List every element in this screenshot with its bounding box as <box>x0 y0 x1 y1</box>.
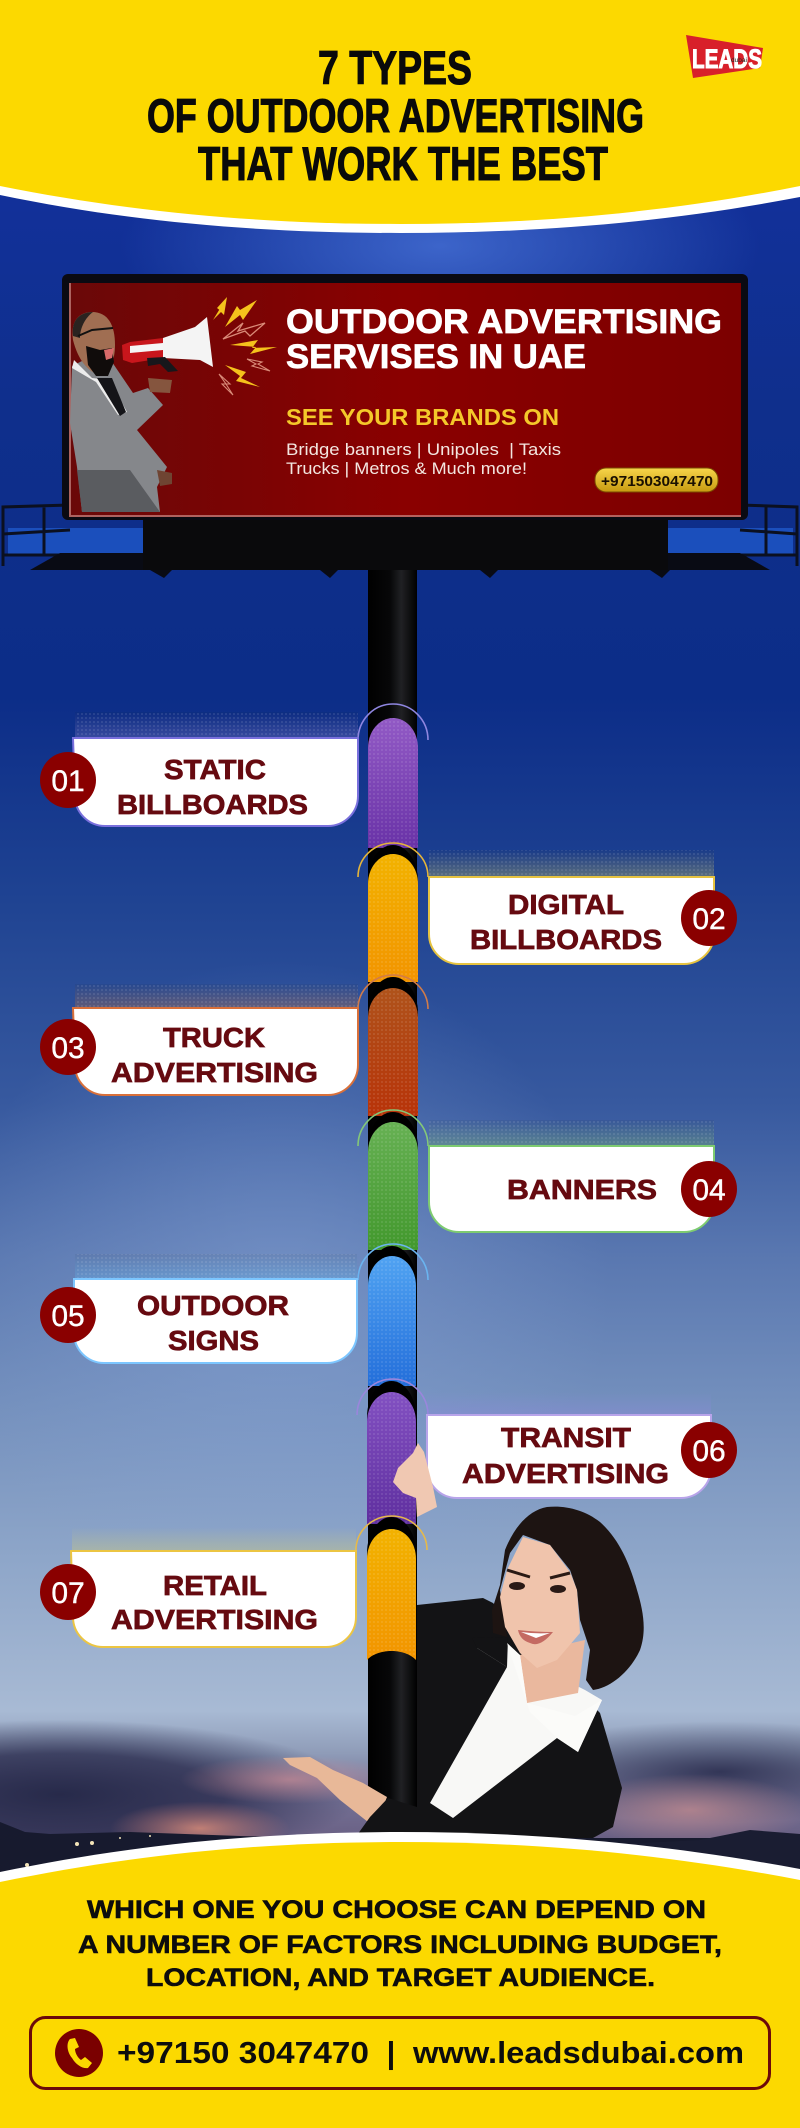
ad phone pill: +971503047470 <box>601 473 713 490</box>
card 03: ADVERTISING <box>111 1057 318 1088</box>
ad headline: OUTDOOR ADVERTISING <box>286 303 722 341</box>
pole segment 7 <box>356 1516 427 1660</box>
footer message: A NUMBER OF FACTORS INCLUDING BUDGET, <box>78 1931 722 1959</box>
ad megaphone <box>122 317 213 372</box>
pole segment 6 <box>357 1379 428 1524</box>
panel edge glow <box>70 283 741 516</box>
ad services list: Trucks | Metros & Much more! <box>286 460 527 478</box>
card 03: 03 <box>51 1032 85 1065</box>
title: OF OUTDOOR ADVERTISING <box>147 89 644 142</box>
billboard support block <box>143 518 668 570</box>
card 02: 02 <box>692 903 726 936</box>
card 02 <box>429 850 737 964</box>
card 06: ADVERTISING <box>462 1458 669 1489</box>
billboard <box>3 274 797 578</box>
card 01: 01 <box>51 765 85 798</box>
ad services list: Bridge banners | Unipoles | Taxis <box>286 441 561 459</box>
card 03: TRUCK <box>163 1022 265 1053</box>
hair <box>492 1507 644 1690</box>
card 05: 05 <box>51 1300 85 1333</box>
card 01: BILLBOARDS <box>117 789 308 820</box>
ad services list <box>286 441 561 478</box>
card 05: SIGNS <box>168 1325 259 1356</box>
card 02: DIGITAL <box>508 889 624 920</box>
contact text: www.leadsdubai.com <box>412 2035 744 2070</box>
logo: Leads Dubai: dubai <box>731 57 747 64</box>
billboard railing <box>3 505 797 578</box>
pole segment 1 <box>358 704 428 848</box>
card 04: BANNERS <box>507 1174 657 1205</box>
contact text: +97150 3047470 <box>117 2035 369 2070</box>
contact text: | <box>387 2035 395 2070</box>
face <box>500 1537 580 1668</box>
hand gripping pole <box>393 1443 437 1517</box>
footer band <box>0 1832 800 2128</box>
card 06 <box>427 1392 737 1498</box>
ad person with suit <box>70 312 172 512</box>
footer message: LOCATION, AND TARGET AUDIENCE. <box>146 1964 655 1992</box>
ad headline: SERVISES IN UAE <box>286 338 586 376</box>
eyes and mouth <box>507 1570 570 1644</box>
ad lightning bolts <box>213 297 277 395</box>
pole segment 3 <box>358 975 428 1116</box>
footer message: WHICH ONE YOU CHOOSE CAN DEPEND ON <box>87 1896 706 1924</box>
ad headline <box>286 303 722 376</box>
pole segment 4 <box>358 1110 428 1250</box>
icon: phone <box>55 2029 103 2077</box>
card 01 <box>40 712 358 826</box>
palm <box>283 1757 387 1822</box>
ad subheading: SEE YOUR BRANDS ON <box>286 404 559 430</box>
billboard ad panel <box>69 283 741 517</box>
collar <box>507 1643 602 1752</box>
card 06: 06 <box>692 1435 726 1468</box>
ad phone pill <box>595 468 718 492</box>
pole segment 2 <box>358 843 428 982</box>
title: 7 TYPES <box>318 41 472 94</box>
contact box <box>30 2018 770 2088</box>
card 07: 07 <box>51 1577 85 1610</box>
card 07: ADVERTISING <box>111 1604 318 1635</box>
header band <box>0 0 800 233</box>
neck <box>520 1640 585 1703</box>
pole segment 5 <box>358 1244 428 1386</box>
pole <box>368 560 417 1860</box>
contact text <box>117 2035 744 2070</box>
card 04: 04 <box>692 1174 726 1207</box>
jacket lapel <box>472 1637 508 1667</box>
billboard frame <box>62 274 748 520</box>
card 01: STATIC <box>164 754 266 785</box>
card 07: RETAIL <box>163 1570 267 1601</box>
logo: Leads Dubai: LEADS <box>692 44 762 74</box>
shirt <box>430 1643 602 1818</box>
logo: Leads Dubai <box>686 35 763 78</box>
woman pointing at the pole <box>283 1443 644 1838</box>
title <box>147 41 644 190</box>
card 07 <box>40 1527 356 1647</box>
card 05 <box>40 1254 357 1363</box>
jacket <box>355 1598 622 1838</box>
card 04 <box>429 1120 737 1232</box>
title: THAT WORK THE BEST <box>198 137 608 190</box>
card 02: BILLBOARDS <box>470 924 662 955</box>
card 06: TRANSIT <box>501 1422 631 1453</box>
card 03 <box>40 984 358 1095</box>
card 05: OUTDOOR <box>137 1290 289 1321</box>
footer message <box>78 1896 722 1992</box>
